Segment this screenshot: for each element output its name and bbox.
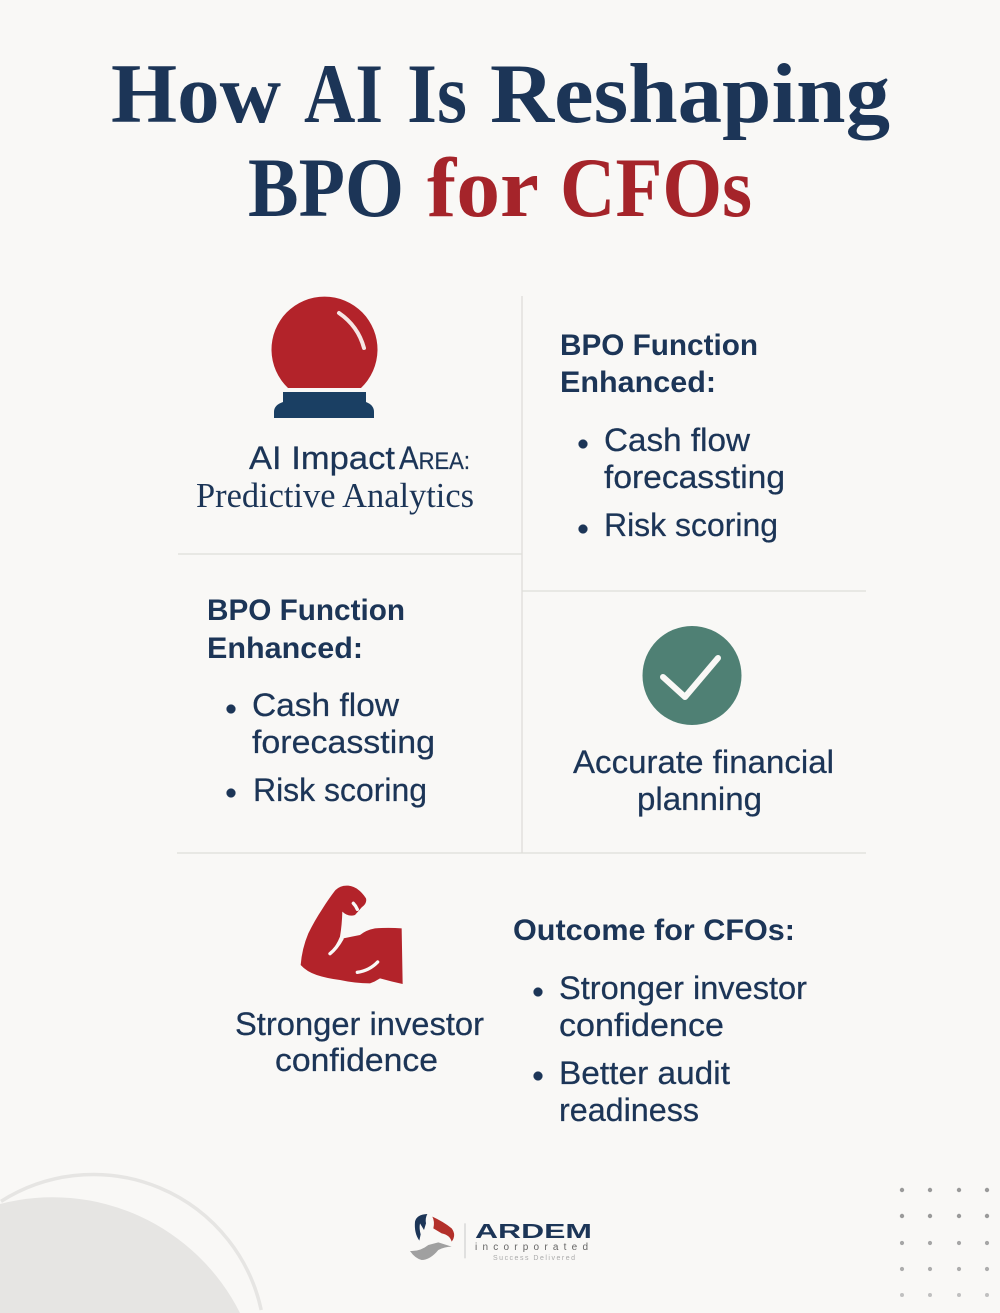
icon: check mark circle (642, 626, 742, 725)
list: BPO functions (226, 687, 435, 808)
heading: Outcome for CFOs: Outcome for CFOs: (513, 914, 795, 947)
wordmark: ARDEM (475, 1221, 592, 1243)
icon: flexed bicep (301, 886, 403, 984)
text: accurate financial planning (573, 744, 834, 817)
text: Predictive Analytics: Predictive Analytics (196, 476, 474, 515)
panel: accurate financial planning (573, 626, 834, 817)
text: tagline: Success Delivered (493, 1255, 575, 1262)
text: stronger investor confidence (235, 1006, 484, 1078)
heading: BPO Function Enhanced: BPO Function (207, 594, 405, 627)
list: BPO functions: Cash flow (252, 687, 400, 723)
title: BPO (248, 141, 404, 235)
title: Reshaping (490, 47, 890, 141)
list: outcomes: Stronger investor (559, 970, 807, 1006)
title: Is (407, 47, 467, 141)
title: CFOs (560, 141, 752, 235)
list: outcomes (534, 970, 807, 1128)
text: accurate financial planning: Accurate financial (573, 744, 834, 780)
list: outcomes: Better audit (559, 1055, 730, 1091)
list: outcomes: readiness (559, 1092, 699, 1128)
heading: BPO Function Enhanced (560, 329, 758, 399)
icon: ARDEM flame mark (410, 1214, 465, 1260)
list: outcomes: confidence (559, 1007, 724, 1043)
text: incorporated: incorporated (475, 1242, 588, 1253)
heading: AI Impact Area: AREA: (399, 440, 470, 476)
list: BPO functions: Risk scoring (253, 772, 427, 808)
list: BPO functions: forecassting (252, 724, 435, 760)
list: BPO functions (578, 422, 785, 543)
list: BPO functions: Cash flow (604, 422, 751, 458)
title: AI (304, 47, 383, 141)
logo: ARDEM Incorporated (410, 1214, 592, 1262)
panel: BPO function enhanced (middle left) (207, 594, 435, 808)
heading: BPO Function Enhanced: Enhanced: (207, 632, 363, 665)
heading: BPO Function Enhanced: Enhanced: (560, 366, 716, 399)
panel: outcome for CFOs (513, 914, 807, 1128)
text: stronger investor confidence: Stronger investor (235, 1006, 484, 1042)
panel: AI impact area (196, 297, 474, 515)
text: stronger investor confidence: confidence (275, 1042, 438, 1078)
title: How (111, 47, 281, 141)
list: BPO functions: forecassting (604, 459, 785, 495)
list: BPO functions: Risk scoring (604, 507, 778, 543)
panel: BPO function enhanced (top right) (560, 329, 785, 543)
title (111, 47, 890, 235)
heading: AI Impact Area (249, 440, 470, 476)
heading: BPO Function Enhanced (207, 594, 405, 665)
heading: AI Impact Area: AI Impact (249, 440, 395, 476)
panel: stronger investor confidence (235, 886, 484, 1078)
title: for (427, 141, 539, 235)
text: accurate financial planning: planning (637, 781, 762, 817)
heading: BPO Function Enhanced: BPO Function (560, 329, 758, 362)
icon: crystal ball (272, 297, 378, 418)
